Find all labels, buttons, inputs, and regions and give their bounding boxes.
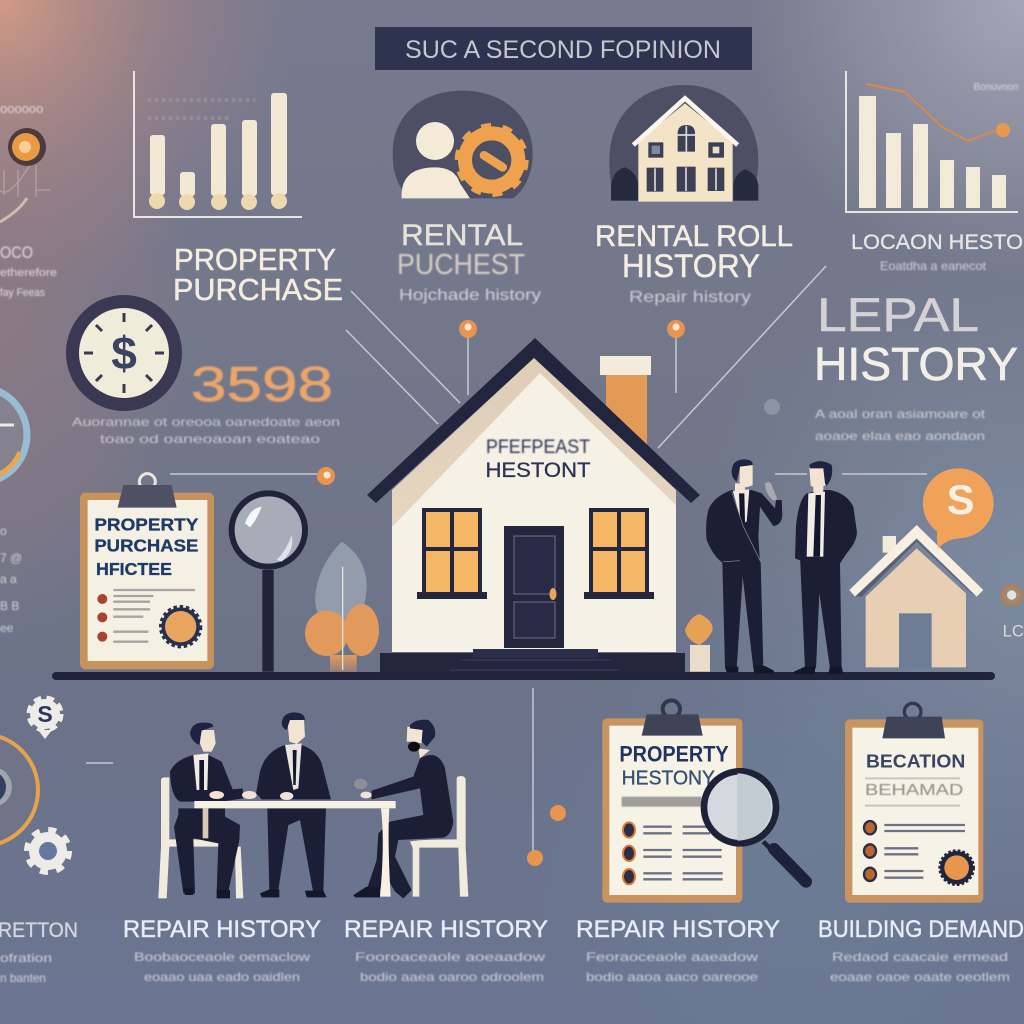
icon: left ring gauge [0, 387, 27, 483]
text: legal caption: A aoal oran asiamoare ot [815, 407, 986, 421]
small house with speech bubble [849, 468, 994, 668]
line and bar chart: top right [846, 71, 1019, 212]
text: left bottom caption [0, 919, 78, 985]
title banner [375, 27, 752, 70]
right window [584, 510, 654, 599]
heading: property purchase: PURCHASE [173, 273, 343, 307]
icon: gear [27, 830, 69, 872]
heading: location history: LOCAON HESTO [851, 231, 1023, 254]
meeting table group [158, 712, 468, 898]
heading: legal history: HISTORY [814, 338, 1018, 390]
caption: repair history 1: REPAIR HISTORY [123, 916, 321, 943]
clipboard: location: BEHAMAD [865, 782, 963, 799]
left edge elements [0, 101, 78, 985]
person seated left [170, 723, 257, 898]
person seated right [353, 720, 453, 898]
icon: dollar clock [66, 295, 182, 411]
icon: dollar gear [30, 699, 60, 739]
clipboard: property purchase: PROPERTY [94, 515, 198, 535]
text: left mid caption: o [0, 524, 7, 538]
heading: location history [851, 231, 1023, 273]
ground line [52, 672, 995, 680]
connector dots [317, 320, 685, 866]
clipboard: property purchase: PURCHASE [94, 536, 198, 556]
clipboard: property history: PROPERTY [619, 742, 729, 767]
icon: dollar gear: S [37, 701, 53, 727]
table [194, 801, 396, 897]
icon: dollar bubble [923, 468, 994, 548]
caption: building demand: Redaod caacaie ermead [832, 950, 1008, 964]
text: left top caption: fay Feeas [0, 287, 45, 299]
person right [794, 461, 857, 674]
clipboard: property purchase [80, 474, 214, 669]
heading: rental purchase: PUCHEST [397, 249, 525, 281]
text: statistic caption [72, 415, 340, 446]
clipboard: location: BECATION [866, 751, 965, 772]
caption: repair history 3: Feoraoceaole aaeadow [586, 950, 758, 964]
right edge gear and captions: LC [1003, 622, 1024, 641]
icon: magnifying glass on clipboard [704, 771, 806, 882]
icon: glowing lamp: oooooo [0, 101, 43, 116]
person standing middle [256, 712, 331, 897]
clipboard: property history [602, 700, 742, 903]
caption: repair history 1 [123, 916, 321, 984]
steps [450, 649, 620, 670]
icon: plant [305, 542, 379, 672]
statistic: 3598: 3598 [191, 358, 333, 412]
icon: glowing lamp [0, 101, 50, 222]
title banner: SUC A SECOND FOPINION [405, 36, 721, 64]
caption: repair history 2 [344, 916, 548, 984]
text: house label [486, 437, 591, 482]
caption: building demand: eoaae oaoe oaate oeotlem [830, 970, 1010, 984]
small potted plant [685, 614, 713, 672]
text: left bottom caption: ofration [0, 951, 52, 965]
heading: rental purchase: Hojchade history [399, 287, 541, 304]
text: left top caption: OCO [0, 243, 33, 262]
central house [367, 338, 700, 673]
person left [706, 459, 782, 673]
text: left mid caption: ee [0, 621, 14, 635]
heading: location history: Eoatdha a eanecot [880, 259, 987, 273]
heading: rental purchase [397, 219, 541, 304]
text: left mid caption: 7 @ [0, 551, 22, 565]
heading: rental roll history: Repair history [629, 289, 751, 306]
heading: rental roll history [595, 220, 793, 306]
caption: repair history 2: bodio aaea oaroo odroolem [360, 970, 544, 984]
bar chart: top left [134, 71, 302, 217]
clipboard: property history: HESTONY [622, 767, 715, 789]
text: left mid caption: B B [0, 599, 19, 613]
text: legal caption: aoaoe elaa eao aondaon [815, 429, 985, 443]
bottom headings [123, 916, 1024, 984]
connector lines [86, 266, 927, 855]
text: left top caption: etherefore [0, 267, 57, 279]
icon: dollar clock: $ [111, 327, 137, 379]
icon: magnifying glass [232, 493, 305, 672]
icon: small dot right [764, 399, 780, 415]
text: left top caption [0, 243, 57, 299]
chairs [158, 776, 468, 898]
text: statistic caption: Auorannae ot oreooa oanedoate aeon [72, 415, 340, 429]
heading: rental purchase: RENTAL [401, 219, 523, 252]
roof [367, 338, 700, 503]
caption: building demand [818, 916, 1024, 984]
line and bar chart: top right: Bonuvnon [973, 82, 1019, 93]
heading: rental roll history: HISTORY [622, 248, 760, 284]
caption: repair history 3 [576, 916, 780, 984]
heading: legal history: LEPAL [817, 288, 979, 341]
text: left bottom caption: RETTON [0, 919, 78, 942]
right edge gear and captions [1002, 585, 1024, 641]
icon: house in circle [609, 85, 758, 202]
icon: left bottom ring [0, 734, 38, 846]
clipboard: property purchase: HFICTEE [96, 559, 172, 579]
left window [417, 510, 487, 599]
caption: repair history 1: Boobaoceaole oemaclow [134, 950, 310, 964]
text: left mid caption [0, 524, 22, 635]
clipboard: location [845, 703, 983, 903]
heading: property purchase [173, 243, 343, 307]
right scene in zoom coordinates [685, 459, 1024, 674]
text: statistic caption: toao od oaneoaoan eoateao [100, 432, 320, 446]
chimney [600, 356, 651, 444]
caption: repair history 2: Fooroaceaole aoeaadow [355, 950, 545, 964]
icon: person and gear [393, 91, 533, 198]
caption: repair history 3: REPAIR HISTORY [576, 916, 780, 943]
heading: legal history [814, 288, 1018, 390]
text: legal caption [815, 407, 986, 443]
heading: property purchase: PROPERTY [174, 243, 336, 277]
icon: dollar bubble: S [947, 476, 975, 523]
text: left bottom caption: n banten [0, 971, 46, 985]
caption: repair history 1: eoaao uaa eado oaidlen [144, 970, 300, 984]
text: left mid caption: a a [0, 572, 17, 586]
door [504, 526, 564, 648]
heading: rental roll history: RENTAL ROLL [595, 220, 793, 253]
text: house label: PFEFPEAST [486, 437, 590, 458]
caption: repair history 3: bodio aaoa aaco oareooe [586, 970, 758, 984]
text: house label: HESTONT [486, 459, 591, 482]
caption: repair history 2: REPAIR HISTORY [344, 916, 548, 943]
